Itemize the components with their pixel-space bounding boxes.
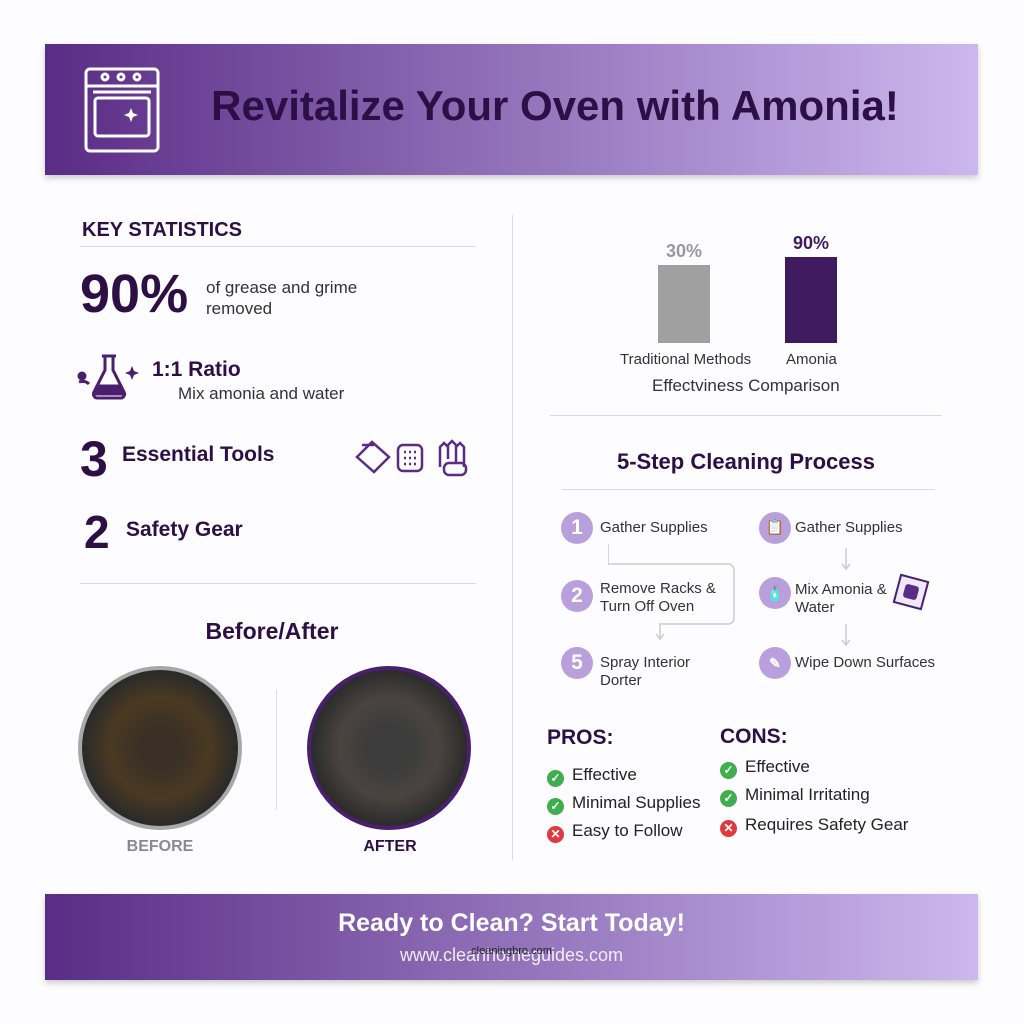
panel: pros: [547, 726, 700, 843]
step: mix: Mix Amonia &: [795, 581, 887, 598]
footer banner: cleaningbro.com: [471, 945, 552, 957]
step 5: Dorter: [600, 672, 642, 689]
step: gather: [759, 512, 903, 544]
stat: safety gear: [84, 506, 243, 558]
heading: KEY STATISTICS: [82, 219, 242, 241]
bar chart: effectiveness comparison: Effectviness Comparison: [652, 376, 840, 395]
step: wipe: Wipe Down Surfaces: [795, 654, 935, 671]
connector: [608, 544, 735, 640]
panel: pros: Effective: [572, 765, 637, 784]
icons: tools: [355, 439, 468, 476]
panel: cons: ✕: [723, 821, 734, 835]
step 5: [561, 647, 690, 689]
step 5: 5: [571, 651, 583, 674]
panel: key statistics: [78, 219, 476, 558]
panel: cons: Requires Safety Gear: [745, 815, 908, 834]
panel: pros: Minimal Supplies: [572, 793, 700, 812]
step: mix: 🧴: [766, 585, 784, 601]
step: gather: 📋: [766, 519, 784, 536]
bar chart: effectiveness comparison: 90%: [793, 233, 829, 253]
stat: ratio: [152, 358, 344, 403]
panel: cons: Effective: [745, 757, 810, 776]
icon: oven: [84, 68, 160, 152]
call to action: Ready to Clean? Start Today!: [338, 909, 685, 937]
label: before: BEFORE: [127, 838, 193, 855]
step: wipe: ✎: [769, 655, 781, 671]
stat: 90%: of grease and grime: [206, 278, 357, 297]
step 2: Turn Off Oven: [600, 598, 694, 615]
icon: flask: [78, 354, 139, 400]
step 1: 1: [571, 516, 583, 539]
stat: 90%: 90%: [80, 264, 188, 324]
step 1: Gather Supplies: [600, 519, 708, 536]
stat: ratio: 1:1 Ratio: [152, 358, 241, 381]
panel: pros: ✕: [550, 827, 561, 841]
icon: spray: [893, 574, 929, 610]
step: wipe: [759, 647, 935, 679]
stat: tools: Essential Tools: [122, 443, 274, 466]
panel: pros: ✓: [550, 799, 561, 813]
step 2: 2: [571, 584, 583, 607]
stat: ratio: Mix amonia and water: [178, 384, 344, 403]
step 2: [561, 580, 716, 615]
panel: before/after: [78, 618, 471, 855]
stat: tools: 3: [80, 431, 108, 487]
step 2: Remove Racks &: [600, 580, 716, 597]
panel: 5-step process: [561, 449, 935, 689]
stat: 90%: removed: [206, 299, 272, 318]
label: after: AFTER: [363, 838, 417, 855]
step: mix: [759, 574, 930, 616]
footer banner: [45, 894, 978, 980]
bar chart: effectiveness comparison: Traditional Methods: [620, 351, 751, 368]
panel: cons: [720, 725, 908, 837]
stat: tools: [80, 431, 274, 487]
step 5: Spray Interior: [600, 654, 690, 671]
panel: cons: CONS:: [720, 725, 788, 748]
stat: safety gear: 2: [84, 506, 110, 558]
url: www.cleanhomeguides.com: [400, 945, 623, 965]
image: after oven: [307, 666, 471, 830]
header banner: [45, 44, 978, 175]
heading: 5-Step Cleaning Process: [617, 449, 875, 474]
bar chart: effectiveness comparison: 30%: [666, 241, 702, 261]
heading: Before/After: [206, 618, 338, 644]
panel: pros: ✓: [550, 771, 561, 785]
stat: safety gear: Safety Gear: [126, 518, 243, 541]
panel: cons: ✓: [723, 763, 734, 777]
step 1: [561, 512, 708, 544]
panel: pros: PROS:: [547, 726, 614, 749]
title: Revitalize Your Oven with Amonia!: [211, 82, 899, 129]
panel: cons: ✓: [723, 791, 734, 805]
bar chart: effectiveness comparison: [620, 233, 840, 395]
step: gather: Gather Supplies: [795, 519, 903, 536]
bar chart: effectiveness comparison: Amonia: [786, 351, 837, 368]
panel: cons: Minimal Irritating: [745, 785, 870, 804]
image: before oven: [78, 666, 242, 830]
panel: pros: Easy to Follow: [572, 821, 683, 840]
step: mix: Water: [795, 599, 834, 616]
stat: 90%: [80, 264, 357, 324]
arrows: [842, 548, 850, 646]
